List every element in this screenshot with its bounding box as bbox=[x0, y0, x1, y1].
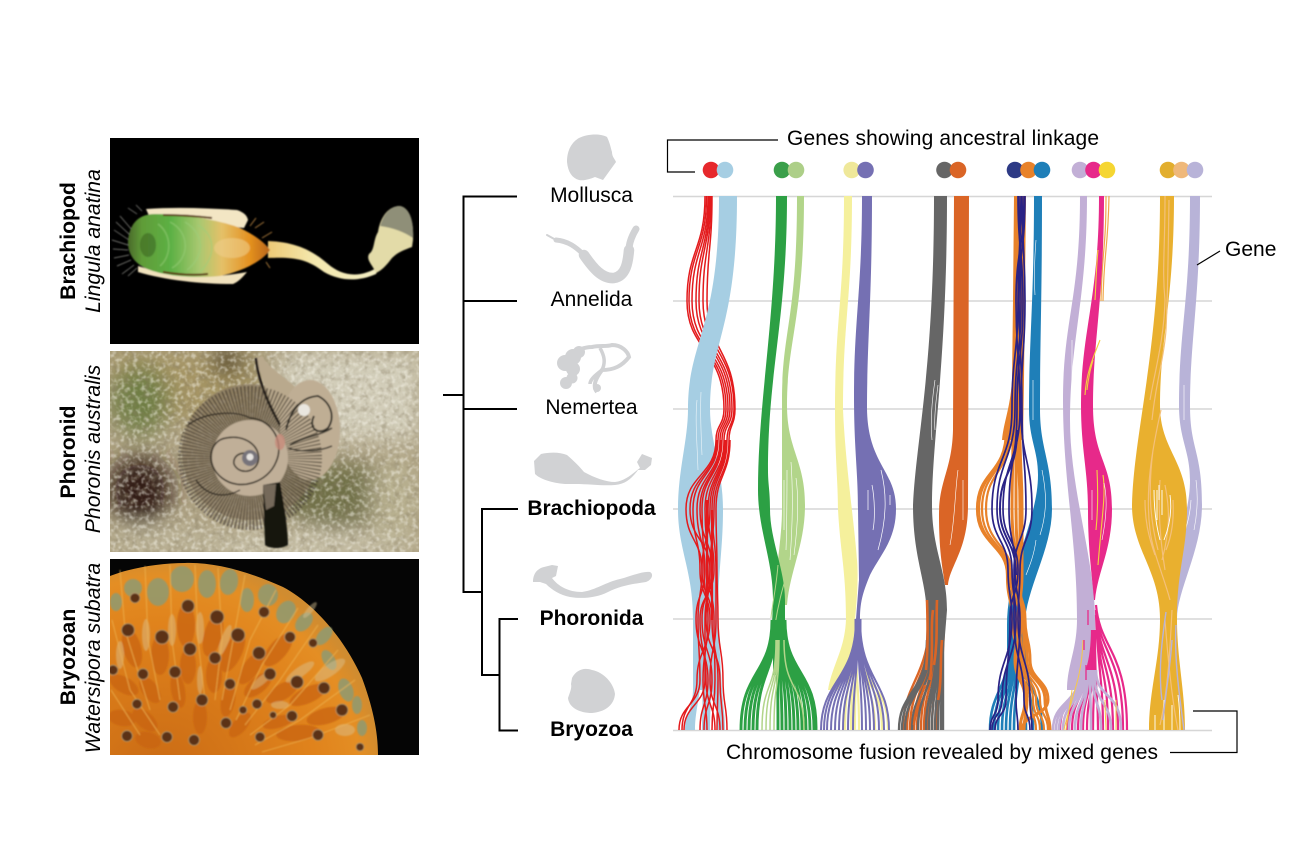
label: Brachiopod Lingula anatina bbox=[57, 169, 105, 313]
silhouette: mollusc bbox=[567, 134, 616, 180]
label: Bryozoan Watersipora subatra: Bryozoan bbox=[57, 609, 80, 705]
annotation: genes showing ancestral linkage: Genes showing ancestral linkage bbox=[787, 127, 1099, 150]
zooid openings bbox=[108, 593, 364, 751]
species grid lines bbox=[673, 196, 1212, 730]
silhouette: bryozoan bbox=[568, 669, 615, 713]
silhouette: annelid bbox=[547, 229, 636, 278]
annotation: chromosome fusion: Chromosome fusion revealed by mixed genes bbox=[726, 741, 1158, 764]
label: Bryozoan Watersipora subatra: Watersipora subatra bbox=[82, 563, 105, 753]
taxon labels: Phoronida bbox=[540, 607, 644, 630]
pale cell texture bbox=[116, 600, 355, 736]
linkage group 6: lilac, pink, yellow bbox=[1053, 196, 1127, 730]
label: Phoronid Phoronis australis: Phoronid bbox=[57, 406, 80, 498]
linkage group 4: gray and orange bbox=[899, 196, 969, 730]
linkage group 3: yellow and purple bbox=[821, 196, 896, 730]
silhouette: phoronid bbox=[533, 565, 652, 598]
annotation: genes showing ancestral linkage bbox=[668, 127, 1099, 172]
taxon labels: Bryozoa bbox=[550, 718, 633, 741]
cell bodies bbox=[106, 603, 347, 751]
label: Phoronid Phoronis australis bbox=[57, 364, 105, 533]
taxon labels: Mollusca bbox=[550, 184, 633, 207]
annotation: chromosome fusion bbox=[726, 711, 1237, 764]
linkage group 5: navy, orange, blue bbox=[977, 196, 1052, 730]
linkage group dots bbox=[703, 162, 1203, 178]
cell walls bbox=[111, 565, 370, 752]
taxon labels: Nemertea bbox=[545, 396, 638, 419]
linkage group 1: red and light blue bbox=[678, 196, 737, 730]
annotation: gene: Gene bbox=[1225, 238, 1276, 261]
label: Brachiopod Lingula anatina: Lingula anatina bbox=[82, 169, 105, 313]
photo: bryozoan Watersipora subatra bbox=[106, 559, 419, 755]
silhouette: nemertean bbox=[557, 345, 629, 392]
annotation: gene bbox=[1197, 238, 1276, 265]
photo: phoronid Phoronis australis bbox=[100, 348, 420, 559]
photo: brachiopod Lingula anatina bbox=[110, 138, 419, 344]
phylogenetic tree bbox=[443, 196, 518, 730]
rim patches bbox=[110, 566, 367, 736]
linkage group 7: gold, peach, lavender bbox=[1132, 196, 1202, 730]
label: Phoronid Phoronis australis: Phoronis australis bbox=[82, 364, 105, 533]
taxon labels: Brachiopoda bbox=[527, 497, 656, 520]
label: Bryozoan Watersipora subatra bbox=[57, 563, 105, 753]
taxon labels bbox=[527, 184, 656, 741]
ribbon plot: genes across species bbox=[678, 196, 1202, 730]
label: Brachiopod Lingula anatina: Brachiopod bbox=[57, 182, 80, 300]
linkage group 2: greens bbox=[741, 196, 816, 730]
infographic canvas bbox=[60, 130, 1276, 764]
taxon labels: Annelida bbox=[551, 288, 633, 311]
silhouette: brachiopod bbox=[534, 453, 652, 485]
